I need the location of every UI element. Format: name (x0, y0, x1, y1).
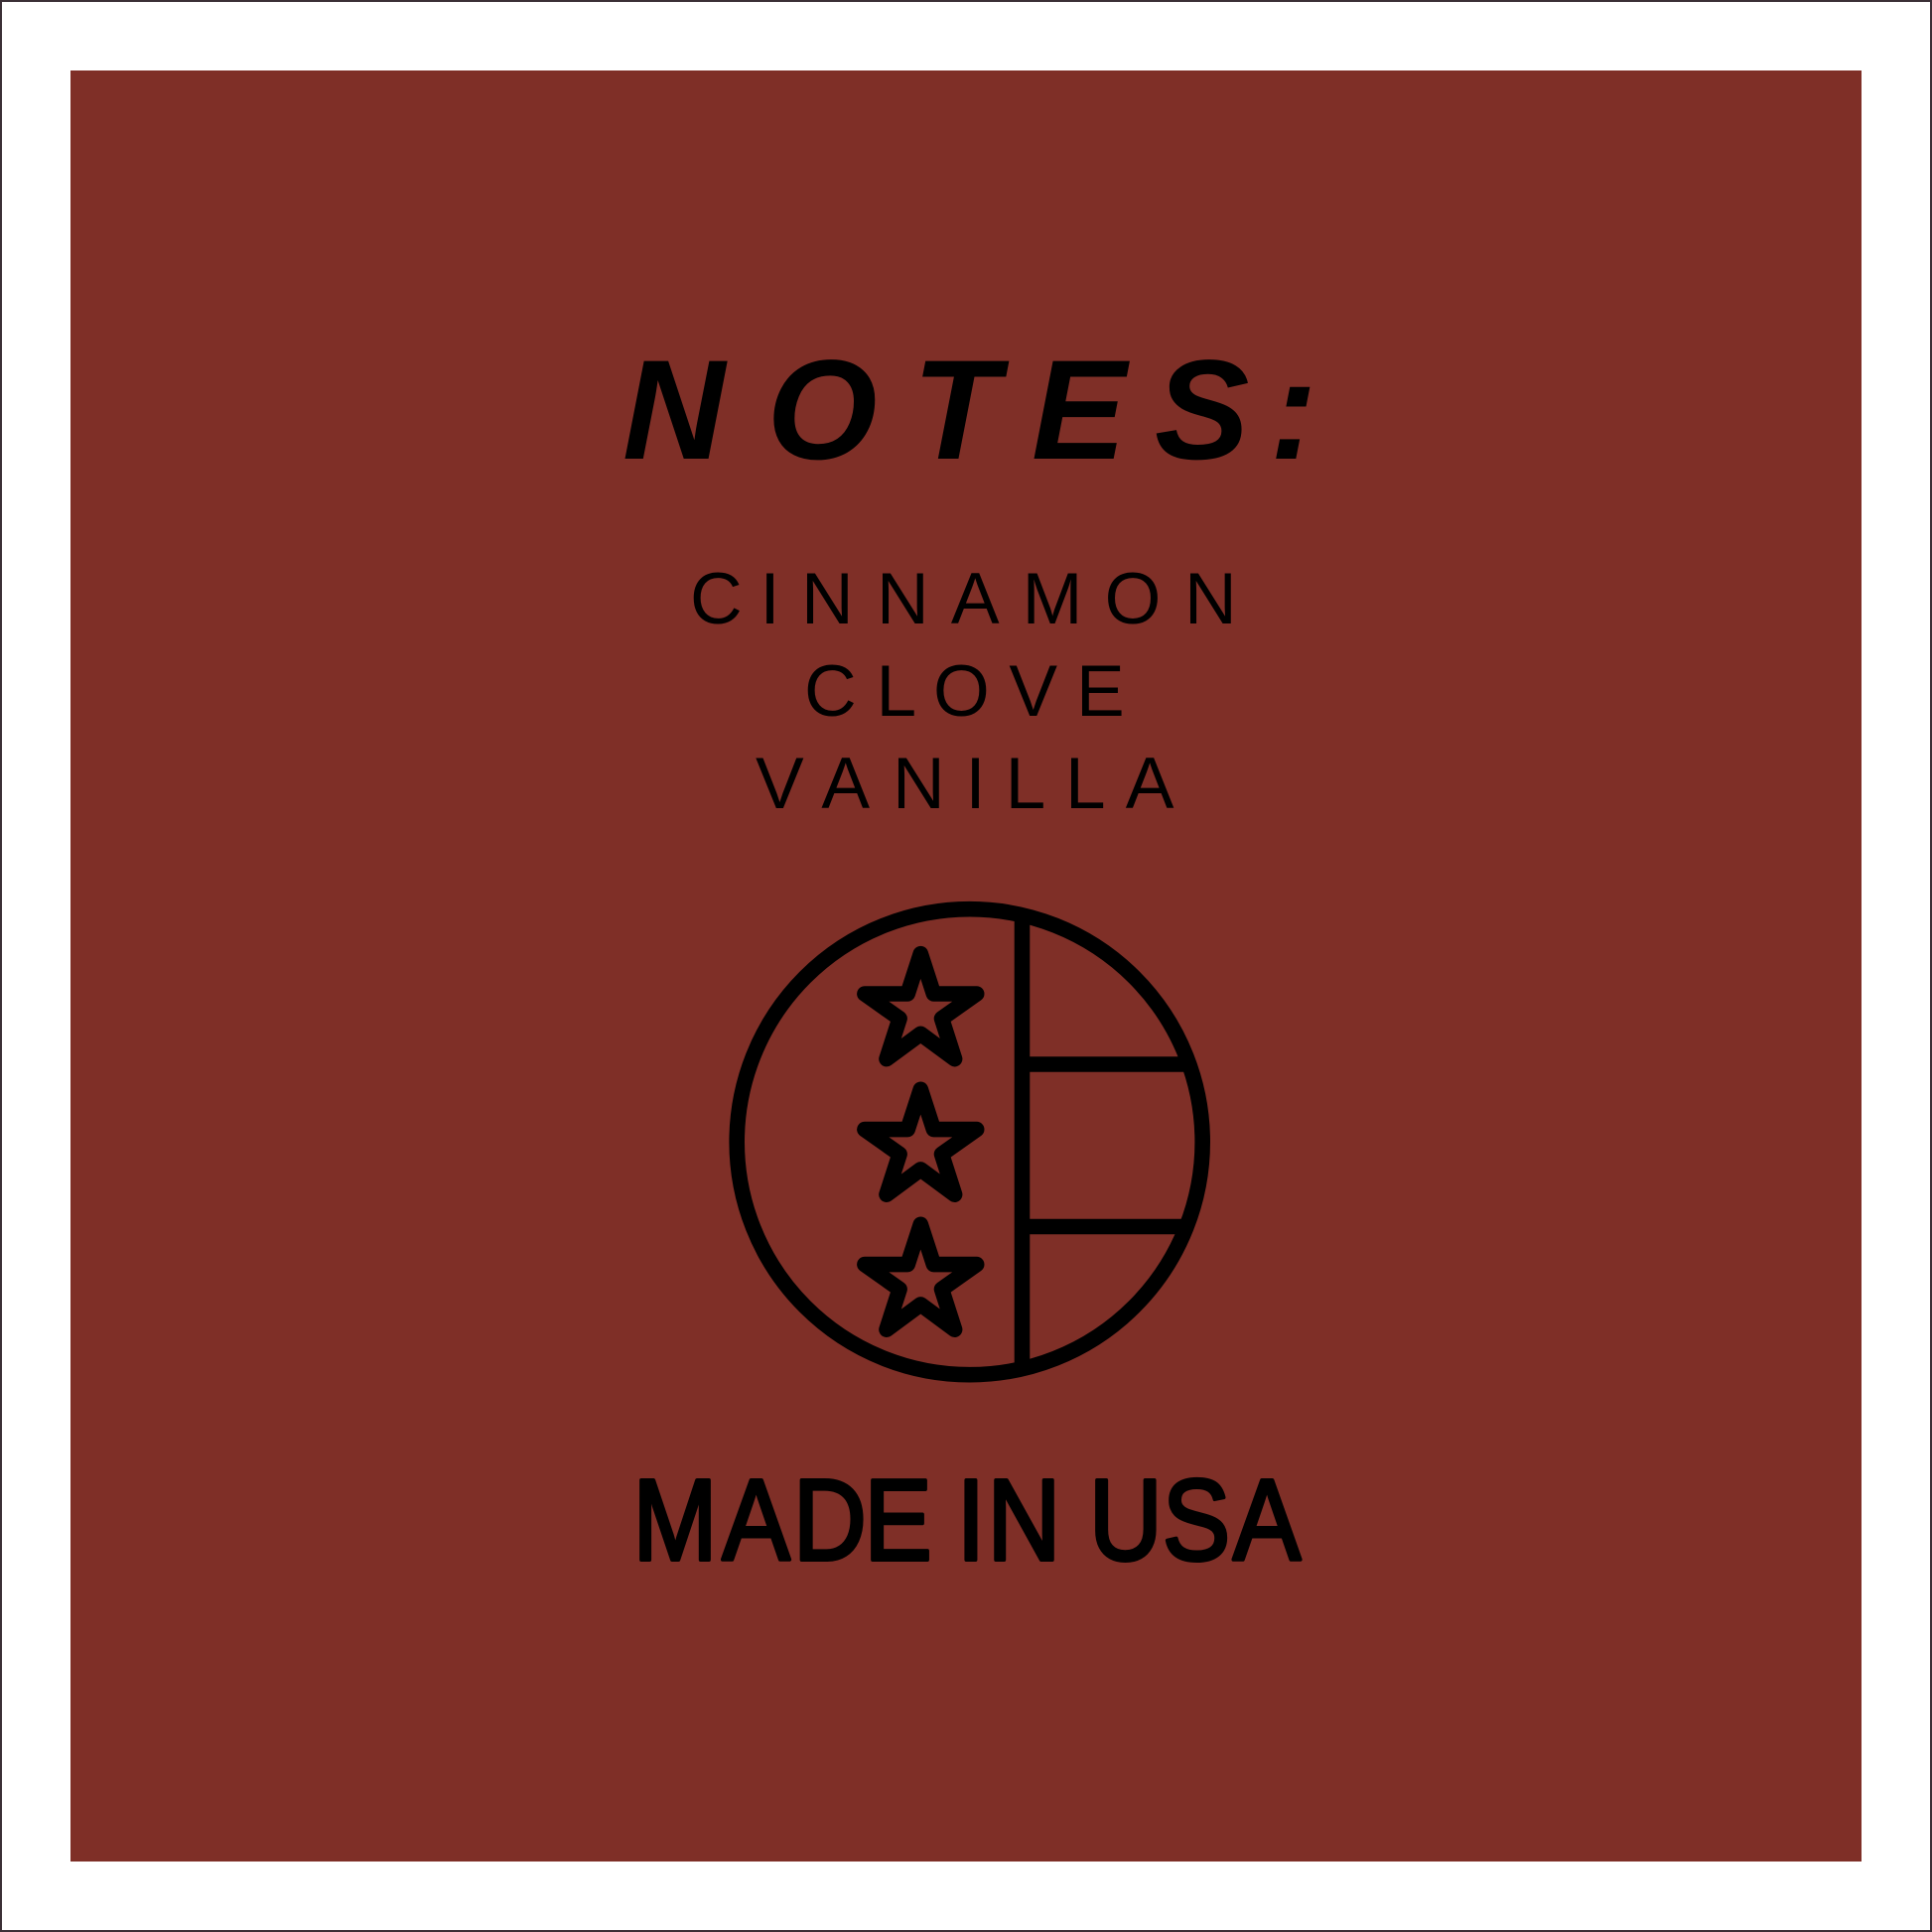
icon: round American flag badge (737, 909, 1202, 1375)
star: middle (865, 1089, 977, 1194)
text block: scent notes list (690, 559, 1237, 824)
flag lower stripe line (1023, 1219, 1189, 1234)
flag vertical divider (1015, 913, 1030, 1370)
star: bottom (865, 1224, 977, 1329)
heading: NOTES: NOTES: (622, 332, 1317, 489)
note: vanilla: VANILLA (756, 744, 1174, 824)
note: cinnamon: CINNAMON (690, 559, 1237, 639)
text: MADE IN USA: MADE IN USA (632, 1456, 1301, 1585)
note: clove: CLOVE (804, 651, 1125, 732)
badge circle (737, 909, 1202, 1375)
flag upper stripe line (1023, 1056, 1189, 1072)
star: top (865, 954, 977, 1059)
